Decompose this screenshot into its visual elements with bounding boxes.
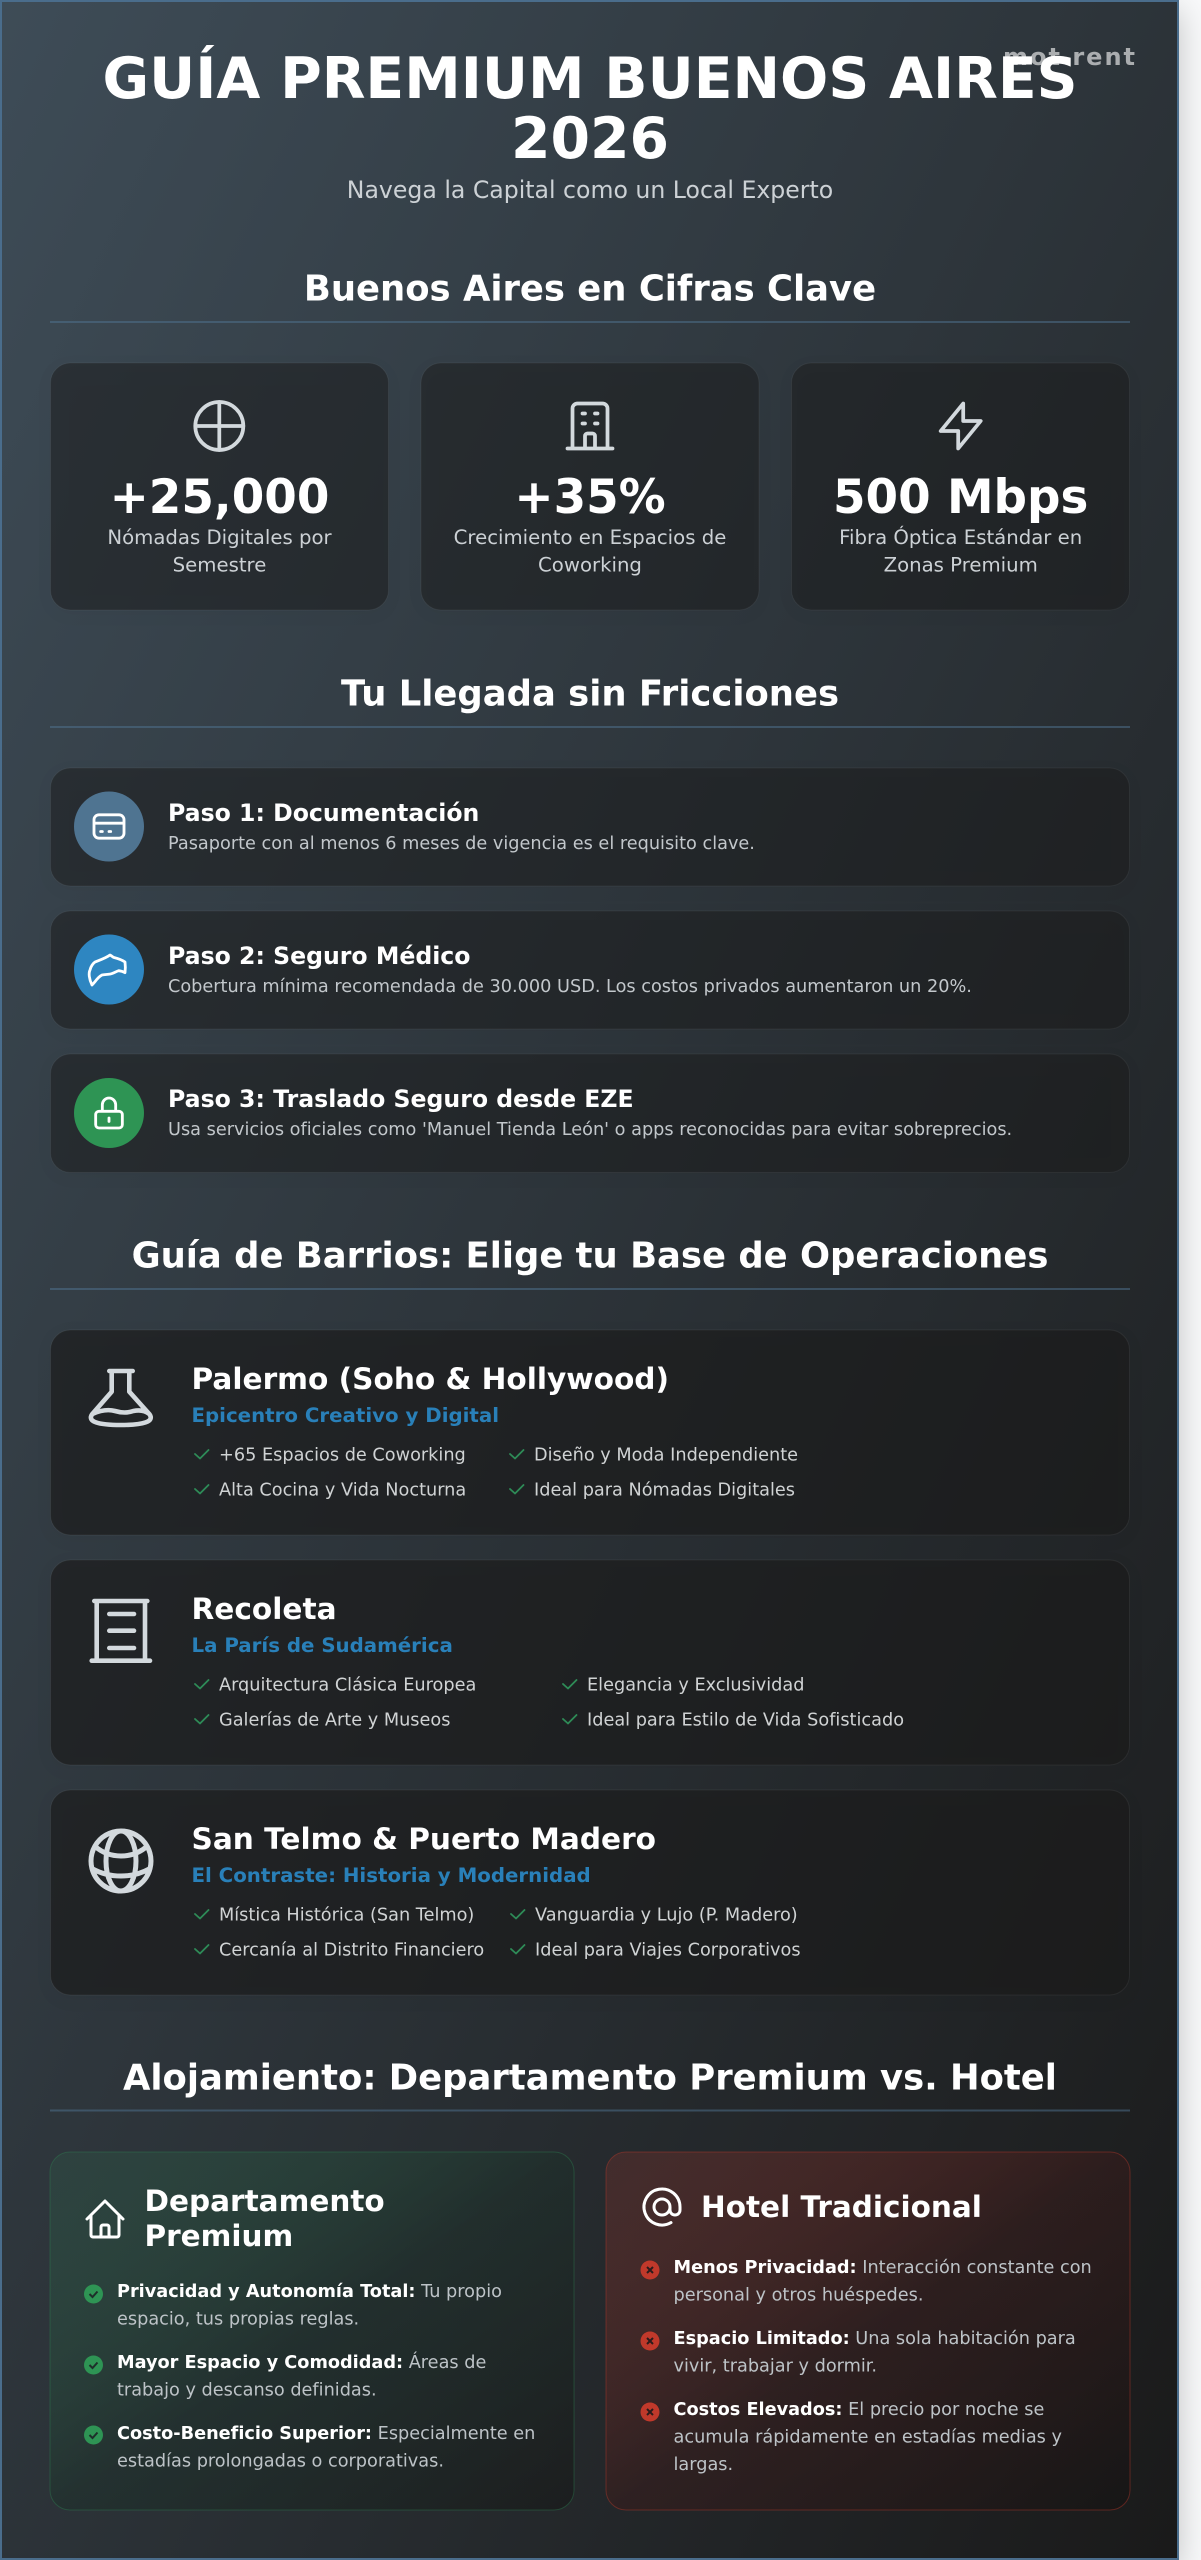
icon: lock	[74, 1078, 144, 1148]
icon: house	[87, 2201, 123, 2237]
pros list: estadías prolongadas o corporativas.	[117, 2452, 444, 2472]
panel: departamento premium	[50, 2152, 574, 2510]
panel: Palermo	[50, 1330, 1130, 1535]
stats row	[50, 363, 1130, 610]
stat card: coworking	[421, 363, 759, 610]
icon: flask	[91, 1371, 151, 1425]
stat value: +35%	[514, 471, 666, 525]
title: GUÍA PREMIUM BUENOS AIRES	[102, 44, 1078, 112]
step text: Cobertura mínima recomendada de 30.000 USD. Los costos privados aumentaron un 20%.	[168, 977, 972, 997]
stat value: +25,000	[110, 471, 329, 525]
step 3	[50, 1054, 1130, 1172]
feature list: Arquitectura Clásica Europea	[219, 1676, 476, 1696]
comparison	[50, 2152, 1130, 2510]
panel: San Telmo & Puerto Madero	[50, 1790, 1130, 1995]
step text: Paso 1: Documentación	[168, 799, 479, 827]
feature list: Diseño y Moda Independiente	[534, 1446, 798, 1466]
panel title: Departamento	[144, 2184, 385, 2218]
step text: Pasaporte con al menos 6 meses de vigencia es el requisito clave.	[168, 834, 755, 854]
feature list: Elegancia y Exclusividad	[587, 1676, 804, 1696]
feature list: Ideal para Estilo de Vida Sofisticado	[587, 1710, 904, 1730]
feature list: +65 Espacios de Coworking	[219, 1446, 466, 1466]
feature list	[195, 1906, 801, 1960]
feature list: Mística Histórica (San Telmo)	[219, 1906, 474, 1926]
feature list: Vanguardia y Lujo (P. Madero)	[535, 1906, 798, 1926]
step text	[168, 1085, 1012, 1140]
stat card: nómadas	[50, 363, 388, 610]
section heading: barrios: Guía de Barrios: Elige tu Base de Operaciones	[132, 1236, 1048, 1276]
cons list	[640, 2258, 1092, 2475]
step text: Usa servicios oficiales como 'Manuel Tienda León' o apps reconocidas para evitar sobreprecios.	[168, 1120, 1012, 1140]
feature list: Alta Cocina y Vida Nocturna	[219, 1480, 466, 1500]
stat label: Nómadas Digitales por	[107, 526, 333, 549]
icon: shield	[74, 934, 144, 1004]
neighbourhood name: Palermo (Soho & Hollywood)	[192, 1362, 669, 1396]
stat card: fibra	[792, 363, 1130, 610]
tagline: La París de Sudamérica	[192, 1634, 453, 1657]
feature list: Cercanía al Distrito Financiero	[219, 1940, 484, 1960]
feature list: Galerías de Arte y Museos	[219, 1710, 450, 1730]
cons list: vivir, trabajar y dormir.	[674, 2356, 877, 2376]
feature list: Ideal para Nómadas Digitales	[534, 1480, 795, 1500]
neighbourhood name: Recoleta	[192, 1592, 337, 1626]
tagline: El Contraste: Historia y Modernidad	[192, 1864, 591, 1887]
cons list: largas.	[674, 2455, 733, 2475]
stat label: Crecimiento en Espacios de	[454, 526, 726, 549]
pros list: trabajo y descanso definidas.	[117, 2380, 377, 2400]
step text: Paso 2: Seguro Médico	[168, 942, 471, 970]
icon: building	[568, 404, 612, 448]
subtitle: Navega la Capital como un Local Experto	[347, 176, 833, 204]
cons list: personal y otros huéspedes.	[674, 2286, 923, 2306]
feature list: Ideal para Viajes Corporativos	[535, 1940, 801, 1960]
pros list	[84, 2282, 535, 2472]
icon: library	[92, 1601, 150, 1661]
stat label: Fibra Óptica Estándar en	[839, 525, 1082, 549]
panel title: Hotel Tradicional	[701, 2190, 982, 2224]
icon: globe	[91, 1831, 151, 1891]
neighbourhood cards	[50, 1330, 1130, 1995]
stat label: Zonas Premium	[884, 554, 1038, 576]
icon: credit card	[74, 792, 144, 862]
section heading: llegada: Tu Llegada sin Fricciones	[341, 674, 839, 714]
pros list: Privacidad y Autonomía Total: Tu propio	[117, 2282, 502, 2302]
cons list: Costos Elevados: El precio por noche se	[674, 2400, 1044, 2420]
title: 2026	[511, 106, 669, 172]
cons list: Menos Privacidad: Interacción constante con	[674, 2258, 1092, 2278]
icon: at sign	[644, 2189, 680, 2225]
section heading: alojamiento: Alojamiento: Departamento Premium vs. Hotel	[123, 2058, 1057, 2098]
cons list: Espacio Limitado: Una sola habitación para	[674, 2329, 1076, 2349]
icon: lightning	[941, 404, 981, 448]
stat label: Coworking	[538, 554, 642, 576]
feature list	[195, 1446, 798, 1500]
watermark: mot rent	[1003, 43, 1137, 71]
step 2	[50, 911, 1130, 1029]
panel: hotel tradicional	[606, 2152, 1130, 2510]
tagline: Epicentro Creativo y Digital	[192, 1404, 499, 1427]
stat value: 500 Mbps	[833, 471, 1088, 525]
steps list	[50, 768, 1130, 1172]
panel title: Premium	[144, 2219, 293, 2253]
step text	[168, 799, 755, 854]
step text: Paso 3: Traslado Seguro desde EZE	[168, 1085, 634, 1113]
section heading: cifras clave: Buenos Aires en Cifras Clave	[304, 268, 876, 310]
feature list	[195, 1676, 904, 1730]
panel: Recoleta	[50, 1560, 1130, 1765]
icon: globe	[195, 402, 243, 450]
pros list: Mayor Espacio y Comodidad: Áreas de	[117, 2351, 486, 2373]
stat label: Semestre	[173, 554, 266, 576]
pros list: Costo-Beneficio Superior: Especialmente en	[117, 2424, 535, 2444]
pros list: espacio, tus propias reglas.	[117, 2310, 359, 2330]
neighbourhood name: San Telmo & Puerto Madero	[192, 1822, 656, 1856]
step text	[168, 942, 972, 997]
header	[102, 44, 1078, 204]
step 1	[50, 768, 1130, 886]
cons list: acumula rápidamente en estadías medias y	[674, 2428, 1062, 2448]
